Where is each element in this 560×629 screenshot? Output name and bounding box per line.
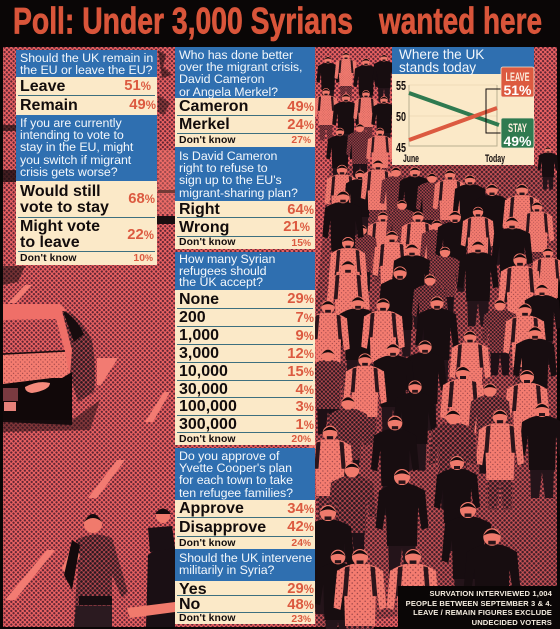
row: might vote to leave: Might vote [20,218,100,235]
question: Should the UK intervene [179,551,312,565]
row: 300,000 [177,416,314,433]
question: Who has done better [179,48,293,62]
row: 30,000: 4% [296,382,314,398]
question: the EU or leave the EU? [20,63,152,77]
row: none: 29% [287,291,314,307]
row: leave: 51% [124,78,151,94]
crowd of people [302,160,560,629]
question: Yvette Cooper's plan [179,461,292,475]
row: none [177,291,314,309]
row: don't know: Don't know [179,538,236,549]
x axis labels: Today [485,153,506,165]
x axis labels: June [403,153,419,165]
row: 30,000 [177,381,314,398]
father carrying child, foreground [127,508,175,627]
question: sign up to the EU's [179,173,282,187]
question [175,549,315,581]
row: 1,000: 1,000 [179,327,219,344]
row: don't know: Don't know [179,135,236,146]
row: don't know [20,253,153,264]
row: approve [177,500,314,518]
row: 3,000: 3,000 [179,345,219,362]
row: 1,000: 9% [296,328,314,344]
row: remain: 49% [129,97,156,113]
question: the UK accept? [179,275,263,289]
chart heading [392,47,534,75]
distant crowd above the chart level [313,52,558,190]
row: might vote to leave: 22% [127,227,154,243]
row: would still vote to stay: 68% [128,191,155,207]
row: wrong [177,219,313,237]
row: yes: Yes [179,581,207,598]
question: over the migrant crisis, [179,60,302,74]
y axis labels: 50 [396,110,406,124]
line chart: where the UK stands today [392,47,534,165]
row: yes: 29% [287,581,314,597]
row: 300,000: 1% [296,417,314,433]
row: 10,000: 10,000 [179,363,228,380]
row: would still vote to stay [18,183,155,218]
row: don't know: 15% [291,238,311,249]
row: wrong: 21% [283,219,310,235]
row: right [177,201,314,218]
question [16,50,157,77]
row: leave: Leave [20,78,65,95]
footnote: methodology [398,586,560,629]
row: none: None [179,291,219,308]
row: don't know [179,538,311,549]
question [175,448,315,500]
panel: military intervention poll [175,549,315,624]
row: don't know: 27% [291,135,311,146]
question: Do you approve of [179,449,279,463]
question: you switch if migrant [20,153,131,167]
line: leave [409,108,497,140]
bracket [486,89,501,133]
row: 1,000 [177,327,314,345]
line: stay [409,93,499,125]
man walking, foreground [62,514,128,627]
panel: switch vote poll [16,115,157,265]
row: don't know: 10% [133,253,153,264]
row: 10,000 [177,363,314,381]
row: 200: 7% [296,310,314,326]
callout: stay 49%: 49% [503,133,532,149]
row: would still vote to stay: Would still [20,183,101,200]
row: 100,000: 100,000 [179,398,237,415]
row: 200: 200 [179,309,206,326]
road markings [5,285,170,600]
question [175,47,315,98]
row: Merkel: Merkel [179,116,230,133]
row: approve: Approve [179,500,244,517]
row: don't know: Don't know [179,434,236,445]
panel: Cameron or Merkel poll [175,47,315,147]
row: remain: Remain [20,97,78,114]
panel: number of refugees poll [175,252,315,445]
footnote: methodology: UNDECIDED VOTERS [472,618,552,627]
background scraps left of panels [3,50,175,285]
row: don't know [179,613,311,625]
question: right to refuse to [179,161,268,175]
row: don't know: Don't know [20,253,77,264]
row: don't know: 24% [291,538,311,549]
row: 10,000: 15% [287,364,314,380]
y axis labels: 45 [396,141,406,155]
row: 200 [177,309,314,327]
row: might vote to leave: to leave [20,234,80,251]
callout: leave 51%: 51% [503,82,532,98]
row: wrong: Wrong [179,219,229,236]
question: migrant-sharing plan? [179,186,298,200]
row: 100,000 [177,398,314,416]
question: Is David Cameron [179,149,277,163]
title: Poll: Under 3,000 Syrians [13,0,353,42]
row: disapprove [177,519,314,537]
question: David Cameron [179,72,264,86]
row: might vote to leave [18,218,155,252]
row: no: 48% [287,597,314,613]
row: would still vote to stay: vote to stay [20,199,109,216]
row: 300,000: 300,000 [179,416,237,433]
row: 100,000: 3% [296,399,314,415]
row: don't know [179,434,311,445]
car [3,304,100,432]
question: stay in the EU, might [20,140,133,154]
callout: leave 51% [501,67,534,98]
row: don't know [179,135,311,146]
question: for each town to take [179,473,293,487]
row: yes [177,581,314,598]
question: militarily in Syria? [179,563,274,577]
row: 3,000 [177,345,314,363]
row: don't know [179,237,311,249]
row: 3,000: 12% [287,346,314,362]
question: Should the UK remain in [20,51,153,65]
row: right: 64% [287,202,314,218]
callout: leave 51%: LEAVE [506,70,530,84]
row: don't know: Don't know [179,237,236,248]
question [16,115,157,181]
question [175,252,315,290]
crowd shading [316,165,557,627]
callout: stay 49%: STAY [508,121,527,135]
chart heading: stands today [399,60,476,75]
row: no: No [179,596,200,613]
question: crisis gets worse? [20,165,118,179]
row: approve: 34% [287,501,314,517]
chart heading: Where the UK [399,47,484,62]
row: don't know: 20% [291,434,311,445]
footnote: methodology: SURVATION INTERVIEWED 1,004 [429,589,552,598]
question: How many Syrian [179,252,275,266]
question: ten refugee families? [179,486,293,500]
y axis labels [396,79,406,155]
row: disapprove: Disapprove [179,519,266,536]
row: no [177,596,314,613]
row: Cameron: Cameron [179,98,248,115]
row: Cameron [177,98,314,116]
panel: migrant-sharing plan poll [175,147,315,249]
footnote: methodology: PEOPLE BETWEEN SEPTEMBER 3 & 4. [406,599,552,608]
x axis labels [403,153,506,165]
row: Merkel [177,116,314,134]
row: leave [18,78,155,96]
row: don't know: Don't know [179,613,236,624]
row: Cameron: 49% [287,99,314,115]
row: don't know: 23% [291,614,311,625]
row: 30,000: 30,000 [179,381,228,398]
row: disapprove: 42% [287,519,314,535]
row: remain [20,97,156,114]
question [175,147,315,201]
panel: remain or leave poll [16,50,157,115]
row: Merkel: 24% [287,117,314,133]
footnote: methodology: LEAVE / REMAIN FIGURES EXCLUDE [413,608,552,617]
question: or Angela Merkel? [179,85,278,99]
callout: stay 49% [501,118,534,149]
question: intending to vote to [20,128,124,142]
y axis labels: 55 [396,79,406,93]
row: right: Right [179,201,220,218]
question: If you are currently [20,116,122,130]
panel: Yvette Cooper plan poll [175,448,315,549]
axes and gridlines [409,85,497,146]
question: refugees should [179,264,266,278]
